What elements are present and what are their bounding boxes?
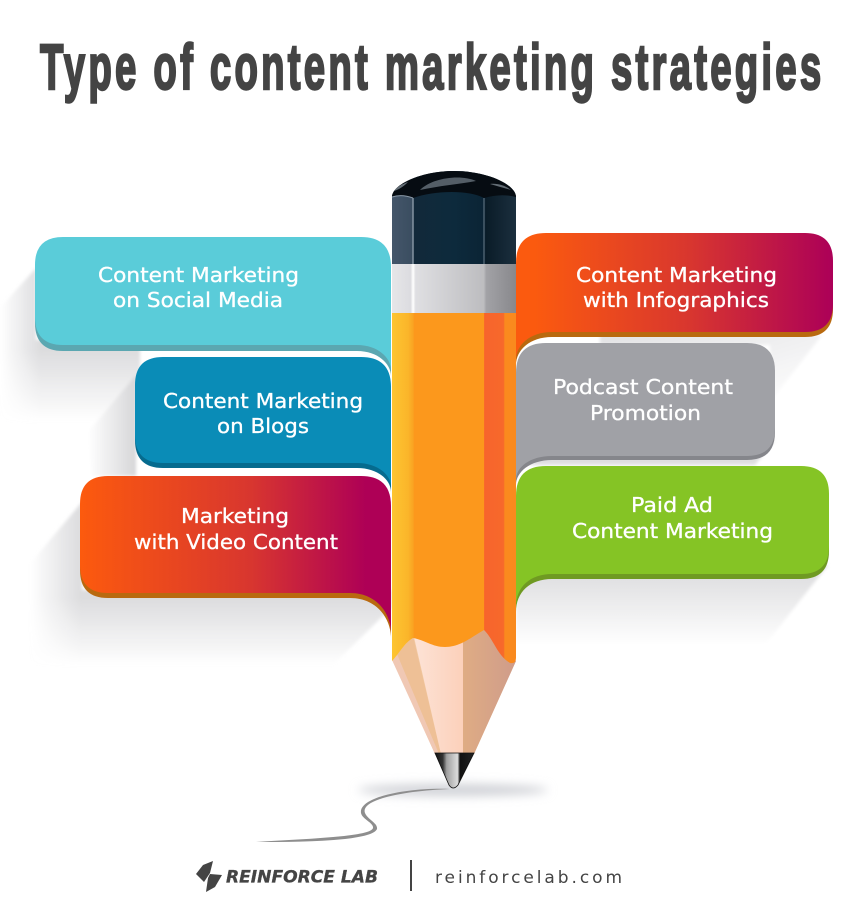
panel: podcast content promotion: Promotion <box>590 401 701 425</box>
website url: reinforcelab.com <box>435 868 622 888</box>
panel: podcast content promotion: Podcast Content <box>553 375 733 399</box>
panel: content marketing on blogs: on Blogs <box>217 414 309 438</box>
panel: content marketing on social media: on Social Media <box>113 288 283 312</box>
pencil ferrule <box>392 264 516 313</box>
panel: marketing with video content: with Video Content <box>134 530 338 554</box>
pencil eraser cap <box>392 171 516 264</box>
panel: content marketing on blogs: Content Marketing <box>163 389 363 413</box>
panel: content marketing with infographics <box>516 233 833 365</box>
logo: reinforce lab <box>196 861 378 892</box>
pencil line squiggle <box>256 789 450 842</box>
panel: content marketing with infographics: with Infographics <box>583 288 769 312</box>
panel: marketing with video content <box>80 476 391 638</box>
long shadows behind the speech panels <box>0 268 828 668</box>
pencil lead <box>435 753 474 788</box>
panel: paid ad content marketing <box>516 466 829 612</box>
pencil shadow on ground <box>358 784 548 796</box>
panel: content marketing on social media <box>35 237 391 376</box>
pencil body <box>392 313 516 663</box>
logo wordmark: REINFORCE LAB <box>226 868 378 886</box>
panel: paid ad content marketing: Paid Ad <box>631 493 713 517</box>
pencil wood tip <box>392 628 516 754</box>
panel: paid ad content marketing: Content Marketing <box>572 519 773 543</box>
panel: content marketing on social media: Content Marketing <box>98 263 299 287</box>
footer divider <box>410 860 412 891</box>
pencil <box>392 171 516 788</box>
logo icon <box>196 861 222 892</box>
panel: content marketing with infographics: Content Marketing <box>576 263 777 287</box>
panel: content marketing on blogs <box>135 357 391 492</box>
title: Type of content marketing strategies <box>40 32 821 104</box>
panel: marketing with video content: Marketing <box>181 504 289 528</box>
panel: podcast content promotion <box>516 343 775 485</box>
